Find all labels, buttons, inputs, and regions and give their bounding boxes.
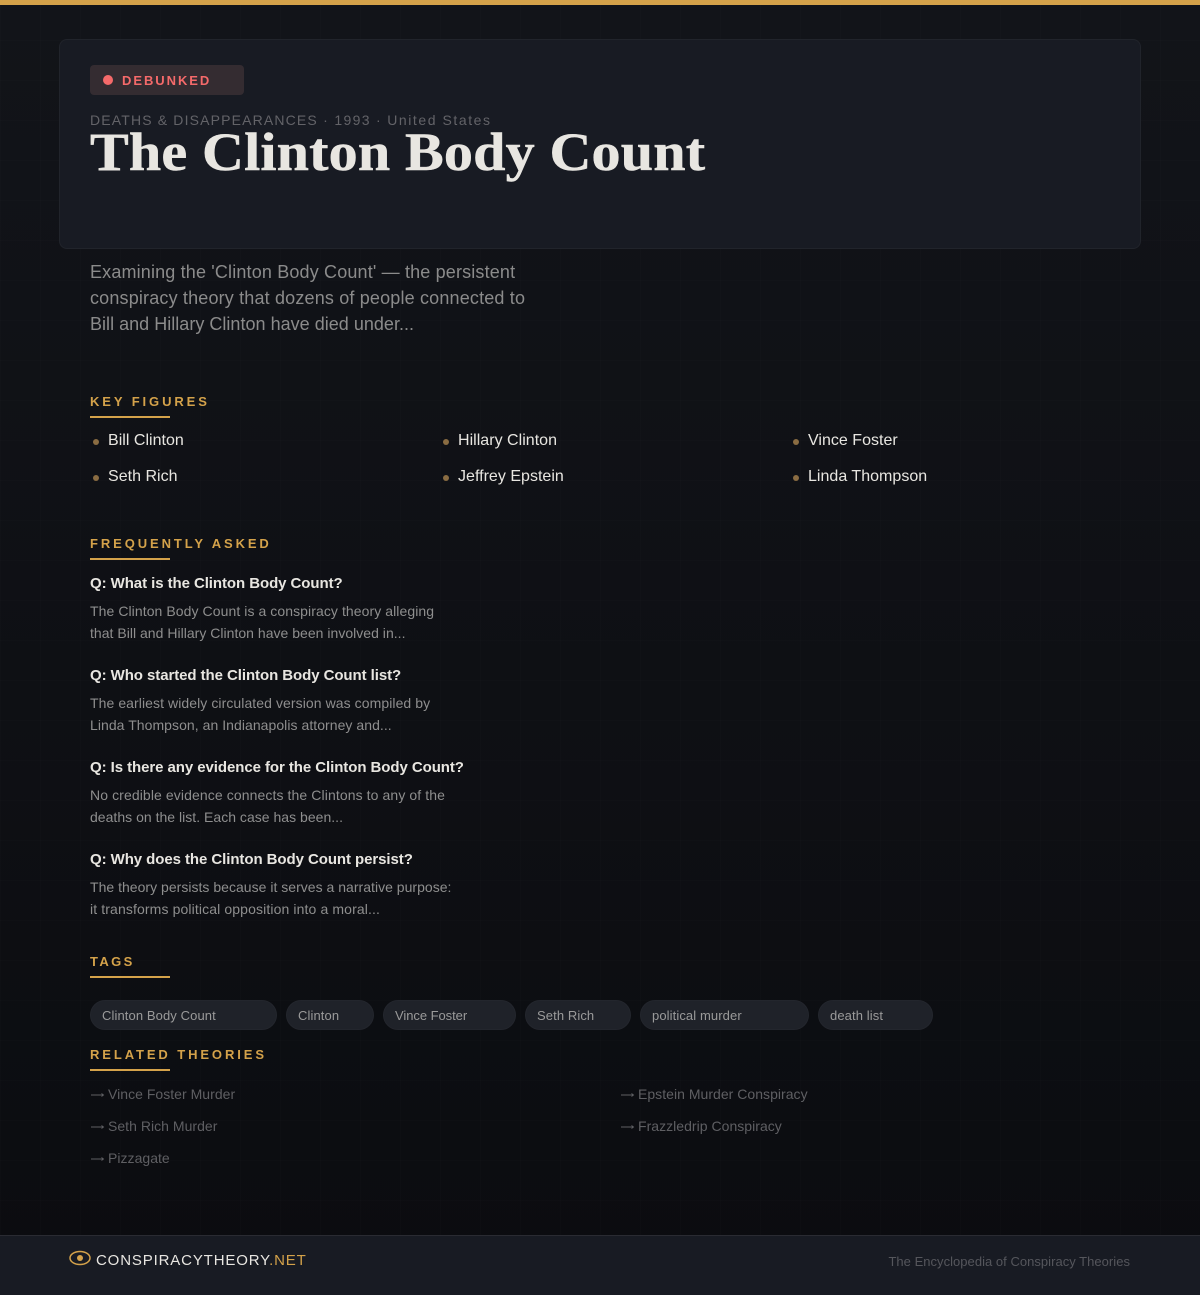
tag — [818, 1000, 933, 1030]
category and date line: DEATHS & DISAPPEARANCES · 1993 · United States — [90, 112, 492, 128]
key figures list — [93, 432, 927, 485]
heading: related theories: RELATED THEORIES — [90, 1047, 267, 1062]
heading: tags: TAGS — [90, 954, 135, 969]
tag: death list — [830, 1008, 883, 1023]
intro text: Examining the 'Clinton Body Count' — the persistent — [90, 262, 515, 282]
tag list — [90, 1000, 933, 1030]
heading: frequently asked: FREQUENTLY ASKED — [90, 536, 272, 551]
tag: political murder — [652, 1008, 742, 1023]
related link: Epstein Murder Conspiracy — [638, 1086, 808, 1102]
figure: Linda Thompson: Linda Thompson — [808, 468, 927, 485]
tag — [640, 1000, 809, 1030]
FAQ item 3: Q: Is there any evidence for the Clinton Body Count? — [90, 759, 464, 776]
FAQ item 4: The theory persists because it serves a narrative purpose: — [90, 879, 451, 895]
panel: footer — [0, 1235, 1200, 1295]
FAQ item 2 — [90, 667, 430, 733]
FAQ item 2: The earliest widely circulated version was compiled by — [90, 695, 430, 711]
figure: Jeffrey Epstein: Jeffrey Epstein — [458, 468, 564, 485]
figure: Seth Rich: Seth Rich — [108, 468, 178, 485]
icon: eye logo — [69, 1250, 91, 1266]
intro text: Bill and Hillary Clinton have died under... — [90, 314, 414, 334]
FAQ item 1: The Clinton Body Count is a conspiracy theory alleging — [90, 603, 434, 619]
tag: Vince Foster — [395, 1008, 467, 1023]
tag — [286, 1000, 374, 1030]
FAQ item 3: No credible evidence connects the Clintons to any of the — [90, 787, 445, 803]
related link: Seth Rich Murder — [108, 1118, 217, 1134]
site name: CONSPIRACYTHEORY.NET — [96, 1252, 307, 1269]
tag — [383, 1000, 516, 1030]
intro text — [90, 262, 525, 334]
figure: Hillary Clinton: Hillary Clinton — [458, 432, 557, 449]
FAQ item 1: Q: What is the Clinton Body Count? — [90, 575, 343, 592]
figure: Vince Foster: Vince Foster — [808, 432, 898, 449]
badge label: DEBUNKED — [122, 73, 211, 88]
top accent bar — [0, 0, 1200, 5]
tag — [90, 1000, 277, 1030]
heading: key figures: KEY FIGURES — [90, 394, 210, 409]
FAQ item 2: Q: Who started the Clinton Body Count list? — [90, 667, 401, 684]
FAQ item 4: it transforms political opposition into a moral... — [90, 901, 380, 917]
footer tagline: The Encyclopedia of Conspiracy Theories — [888, 1254, 1130, 1269]
related link: Frazzledrip Conspiracy — [638, 1118, 782, 1134]
title: The Clinton Body Count — [90, 122, 705, 182]
tag — [525, 1000, 631, 1030]
FAQ item 2: Linda Thompson, an Indianapolis attorney and... — [90, 717, 392, 733]
FAQ item 1: that Bill and Hillary Clinton have been involved in... — [90, 625, 405, 641]
badge dot — [103, 75, 113, 85]
FAQ item 3: deaths on the list. Each case has been... — [90, 809, 343, 825]
FAQ item 3 — [90, 759, 464, 825]
panel: header card — [59, 39, 1141, 249]
intro text: conspiracy theory that dozens of people connected to — [90, 288, 525, 308]
FAQ item 1 — [90, 575, 434, 641]
FAQ item 4 — [90, 851, 451, 917]
tag: Clinton Body Count — [102, 1008, 216, 1023]
related link: Pizzagate — [108, 1150, 170, 1166]
status badge: debunked — [90, 65, 244, 95]
tag: Clinton — [298, 1008, 339, 1023]
figure: Bill Clinton: Bill Clinton — [108, 432, 184, 449]
FAQ item 4: Q: Why does the Clinton Body Count persist? — [90, 851, 413, 868]
tag: Seth Rich — [537, 1008, 594, 1023]
related link: Vince Foster Murder — [108, 1086, 235, 1102]
